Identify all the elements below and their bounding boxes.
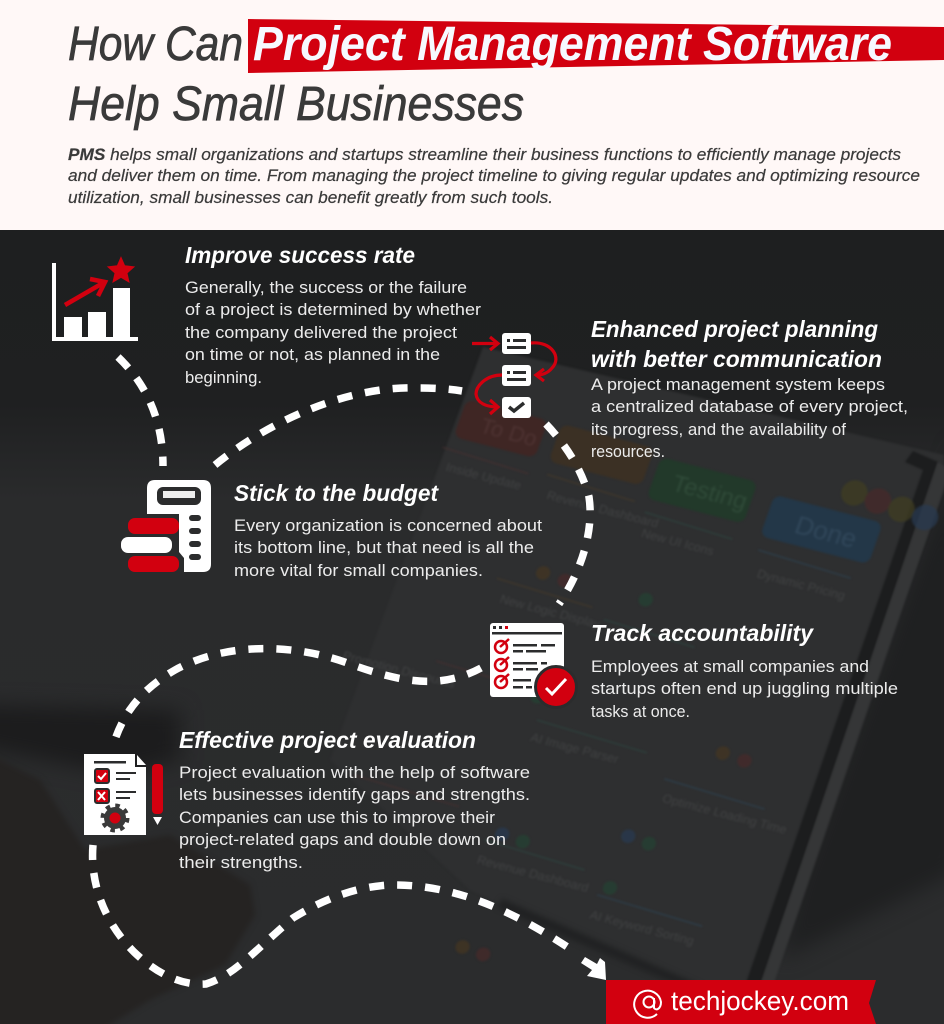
body text: its progress, and the availability of <box>591 420 846 439</box>
brand name: techjockey.com <box>671 986 849 1016</box>
section: improve success rate <box>52 242 481 387</box>
intro text: utilization, small businesses can benefit greatly from such tools. <box>68 189 553 207</box>
kanban board: New UI Icons <box>639 526 716 558</box>
red title banner <box>248 19 944 73</box>
body text: Every organization is concerned about <box>234 516 542 535</box>
heading: Effective project evaluation <box>179 727 476 753</box>
kanban board: To Do <box>477 413 541 451</box>
body text: Employees at small companies and <box>591 657 869 676</box>
kanban board: New Logic Display <box>498 592 603 631</box>
kanban board: Promotion Discounts <box>341 649 457 691</box>
intro text: PMS helps small organizations and startups streamline their business functions to efficiently manage projects <box>68 146 901 164</box>
dark background panel <box>0 230 944 1024</box>
body text <box>234 516 542 580</box>
body text: the company delivered the project <box>185 323 457 342</box>
header panel <box>0 0 944 230</box>
section: stick to the budget <box>121 480 542 580</box>
heading: with better communication <box>591 346 882 372</box>
heading: Track accountability <box>591 620 814 646</box>
kanban board: Done <box>791 512 860 554</box>
body text: a centralized database of every project, <box>591 397 908 416</box>
icon: bar chart with star <box>52 258 138 341</box>
heading: Improve success rate <box>185 242 415 268</box>
body text: Project evaluation with the help of software <box>179 763 530 782</box>
body text: tasks at once. <box>591 702 690 721</box>
kanban board <box>344 401 939 962</box>
arrow head <box>581 957 606 980</box>
kanban board: Dynamic Pricing <box>755 567 847 603</box>
icon: calculator and coins <box>121 480 211 572</box>
body text: its bottom line, but that need is all the <box>234 538 534 557</box>
body text: resources. <box>591 442 665 461</box>
icon: evaluation document <box>84 754 163 835</box>
kanban board: Revenue Dashboard <box>545 488 661 531</box>
heading <box>591 316 882 372</box>
icon: task list with check <box>490 623 576 708</box>
title: How Can <box>68 18 243 71</box>
body text: startups often end up juggling multiple <box>591 679 898 698</box>
body text <box>591 657 898 721</box>
body text: project-related gaps and double down on <box>179 830 506 849</box>
kanban board: AI Keyword Sorting <box>588 908 696 948</box>
intro text <box>68 146 920 207</box>
body text: on time or not, as planned in the <box>185 345 440 364</box>
body text: Generally, the success or the failure <box>185 278 467 297</box>
section: enhanced project planning <box>472 316 908 461</box>
kanban board: Testing <box>668 470 751 515</box>
icon: workflow checklist <box>472 333 556 418</box>
body text: Companies can use this to improve their <box>179 808 495 827</box>
body text: lets businesses identify gaps and strengths. <box>179 785 530 804</box>
dashed connector paths <box>93 357 606 984</box>
body text <box>179 763 530 872</box>
section: track accountability <box>490 620 898 721</box>
heading: Enhanced project planning <box>591 316 878 342</box>
body text: A project management system keeps <box>591 375 885 394</box>
heading: Stick to the budget <box>234 480 439 506</box>
body text: beginning. <box>185 368 262 387</box>
body text: their strengths. <box>179 853 303 872</box>
kanban board: Optimize Loading Time <box>660 791 789 837</box>
title <box>68 18 944 131</box>
kanban board: Revenue Dashboard <box>475 853 591 895</box>
title: Help Small Businesses <box>68 78 524 131</box>
blurred laptop photo background <box>0 347 944 1024</box>
icon: at sign logo <box>634 991 661 1018</box>
body text: of a project is determined by whether <box>185 300 481 319</box>
body text: more vital for small companies. <box>234 561 483 580</box>
body text <box>591 375 908 461</box>
kanban board: Inside Update <box>444 460 523 493</box>
footer brand ribbon <box>606 980 876 1024</box>
section: effective project evaluation <box>84 727 530 872</box>
body text <box>185 278 481 387</box>
title: Project Management Software <box>253 18 892 71</box>
kanban board: AI Image Parser <box>529 730 621 766</box>
intro text: and deliver them on time. From managing the project timeline to giving regular updates and optimizing resource <box>68 167 920 185</box>
